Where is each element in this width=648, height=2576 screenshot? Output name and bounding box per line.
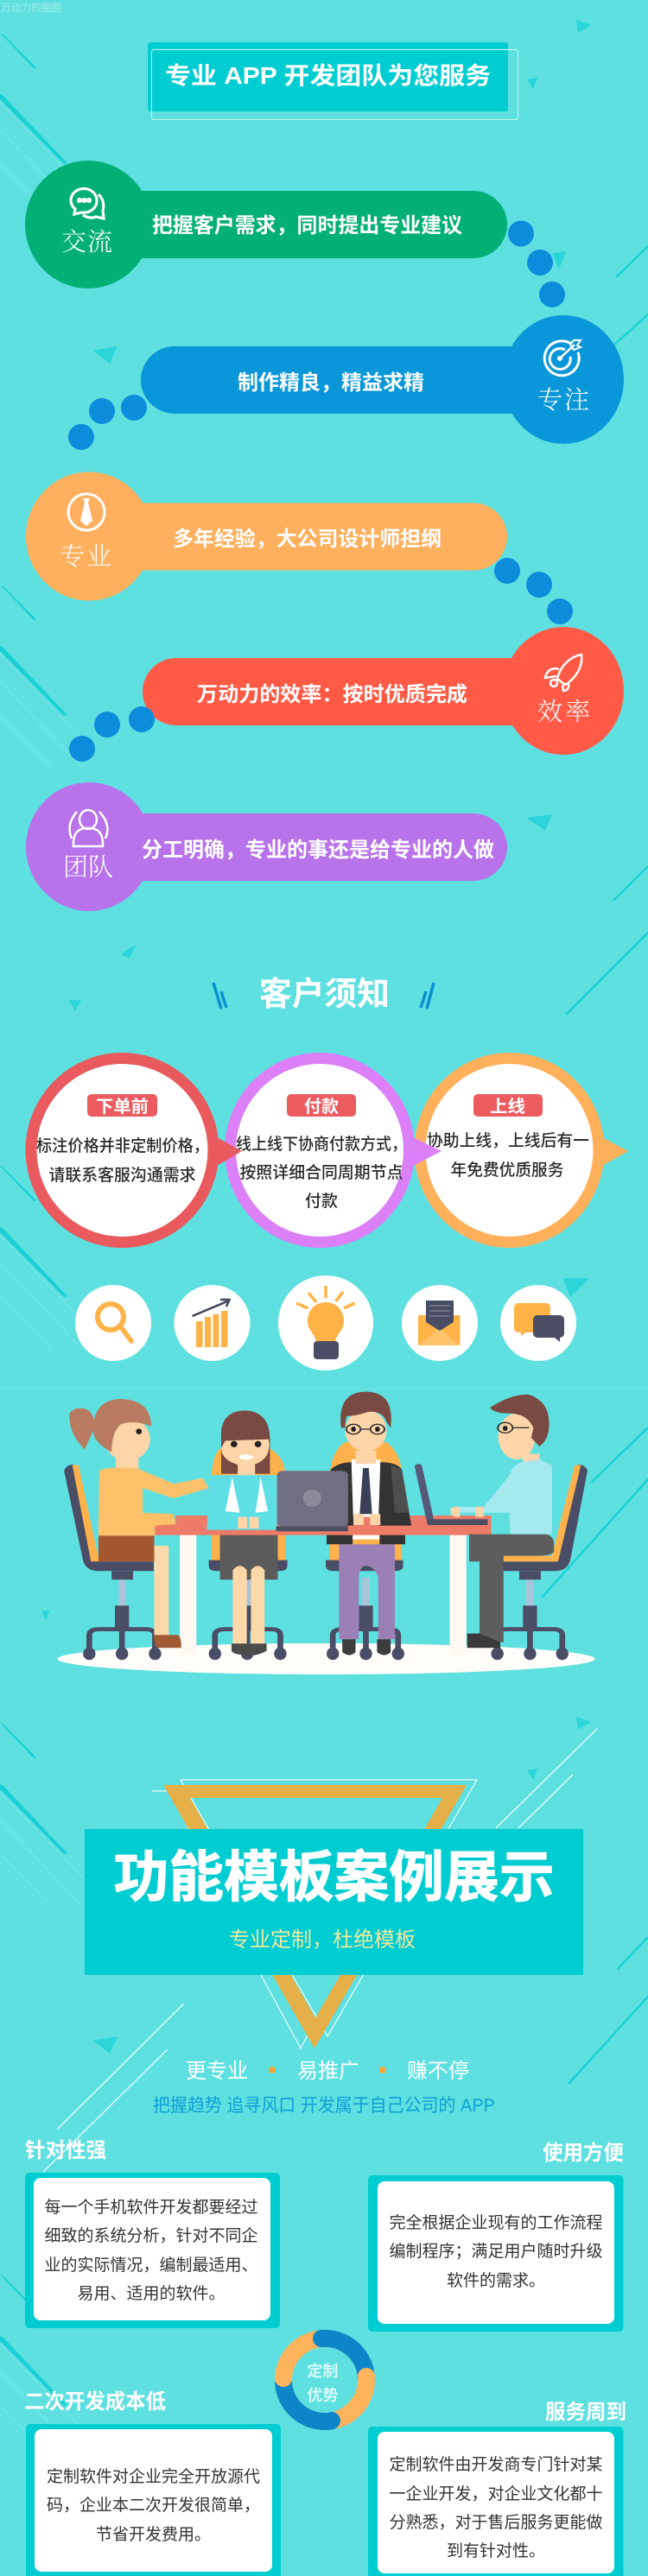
icon row: [75, 1275, 576, 1370]
text: 上线 body: 年免费优质服务: [451, 1161, 563, 1180]
badge: 下单前: [87, 1094, 157, 1117]
panel: 效率 red: [143, 627, 624, 755]
laptop: centre: [276, 1471, 348, 1531]
body text: 每一个手机软件开发都要经过: [44, 2198, 258, 2217]
body text: [47, 2467, 260, 2544]
heading: 二次开发成本低: [24, 2390, 166, 2414]
banner: 功能模板案例展示: [85, 1829, 583, 1975]
ring label: 优势: [308, 2387, 339, 2404]
heading: 服务周到: [545, 2401, 626, 2424]
panel: 专业 orange: [26, 472, 507, 601]
label: 专注: 专注: [537, 381, 589, 416]
text: 制作精良: 制作精良，精益求精: [238, 371, 424, 395]
white diagonal lines: [43, 1729, 597, 2172]
badge: 上线: 上线: [490, 1097, 525, 1117]
text: 下单前 body: 请联系客服沟通需求: [48, 1166, 195, 1185]
icon: speech bubbles: [500, 1285, 576, 1361]
panel: 二次开发成本低: [24, 2390, 281, 2576]
heading: 使用方便: [543, 2141, 624, 2165]
icon: light bulb: [278, 1275, 373, 1370]
panel: 针对性强: [25, 2139, 280, 2328]
panel: 服务周到: [368, 2401, 626, 2576]
ring: 定制优势: [275, 2330, 375, 2429]
icon: envelope: [402, 1285, 478, 1361]
connector dots 2: [68, 395, 147, 450]
slogan row: 更专业: [186, 2060, 248, 2083]
panel: 下单前: [31, 1059, 242, 1242]
body text: 业的实际情况，编制最适用、: [44, 2256, 258, 2275]
person: woman with ponytail: [69, 1399, 209, 1648]
slogan row: 易推广: [297, 2060, 359, 2083]
label: 专业: 专业: [60, 537, 111, 573]
body text: 易用、适用的软件。: [77, 2284, 226, 2303]
body text: 节省开发费用。: [96, 2525, 211, 2544]
label: 团队: 团队: [63, 848, 113, 883]
title: 专业 APP 开发团队为您服务: [165, 62, 491, 89]
tagline: 把握趋势 追寻风口 开发属于自己公司的 APP: [153, 2096, 495, 2116]
body text: 完全根据企业现有的工作流程: [389, 2213, 603, 2232]
badge: 下单前: 下单前: [96, 1097, 149, 1117]
body text: [389, 2455, 603, 2560]
panel: 上线: [420, 1059, 628, 1242]
text: 付款 body: 线上线下协商付款方式，: [236, 1134, 407, 1154]
banner heading: 功能模板案例展示: [114, 1846, 555, 1908]
body text: 编制程序；满足用户随时升级: [389, 2242, 603, 2261]
body text: [389, 2213, 603, 2290]
icon: target: [544, 340, 581, 376]
body text: 定制软件由开发商专门针对某: [389, 2455, 603, 2474]
slogan row: [186, 2060, 469, 2083]
icon: magnifier: [75, 1285, 151, 1361]
banner subtitle: 专业定制，杜绝模板: [229, 1928, 416, 1952]
person: man in blue: [451, 1395, 554, 1648]
body text: 分熟悉，对于售后服务更能做: [389, 2513, 603, 2532]
icon: growth chart: [175, 1285, 251, 1361]
body text: 码，企业本二次开发很简单，: [47, 2496, 260, 2515]
label: 交流: 交流: [61, 223, 112, 258]
badge: 付款: 付款: [304, 1097, 339, 1117]
label: 效率: 效率: [537, 693, 590, 728]
triangle frame: [152, 1780, 477, 2048]
panel: 团队 purple: [26, 782, 507, 911]
body text: [44, 2198, 258, 2303]
text: 下单前 body: [36, 1136, 209, 1185]
badge: 付款: [287, 1094, 356, 1117]
ring label: [308, 2362, 339, 2404]
body text: 到有针对性。: [447, 2541, 545, 2560]
chair: second: [209, 1448, 288, 1660]
body text: 定制软件对企业完全开放源代: [47, 2467, 260, 2486]
floor ellipse: [58, 1643, 595, 1674]
text: 下单前 body: 标注价格并非定制价格，: [36, 1136, 209, 1155]
watermark: 万动力的圈圈: [1, 1, 61, 14]
connector dots 1: [508, 221, 565, 307]
person: man in suit: [327, 1392, 411, 1655]
text: 上线 body: [427, 1131, 589, 1180]
body text: 一企业开发，对企业文化都十: [389, 2484, 603, 2503]
chair: right: [491, 1465, 588, 1660]
body text: 软件的需求。: [447, 2271, 545, 2290]
slogan row: 赚不停: [407, 2060, 469, 2083]
panel: 使用方便: [368, 2141, 624, 2332]
text: 付款 body: 付款: [305, 1192, 338, 1211]
panel: 专注 blue: [141, 315, 624, 444]
text: 多年经验: 多年经验，大公司设计师担纲: [173, 527, 442, 551]
text: 把握客户需求: 把握客户需求，同时提出专业建议: [152, 213, 462, 237]
laptop: right: [418, 1466, 488, 1525]
text: 分工明确: 分工明确，专业的事还是给专业的人做: [142, 839, 494, 862]
title: [148, 42, 518, 119]
badge: 上线: [473, 1094, 543, 1117]
icon: tie: [68, 494, 105, 530]
text: 万动力的效率: 万动力的效率：按时优质完成: [197, 683, 467, 706]
heading: 客户须知: 客户须知: [259, 977, 390, 1013]
table: [155, 1516, 491, 1655]
connector dots 4: [69, 706, 155, 762]
text: 付款 body: 按照详细合同周期节点: [240, 1163, 403, 1182]
chair: third: [326, 1442, 404, 1660]
body text: 细致的系统分析，针对不同企: [44, 2226, 258, 2245]
heading: 针对性强: [25, 2139, 106, 2162]
icon: chat bubbles: [71, 188, 104, 218]
text: 上线 body: 协助上线，上线后有一: [427, 1131, 589, 1150]
panel: 交流 green: [25, 161, 507, 288]
heading: 客户须知: [213, 977, 434, 1013]
person: woman with bangs: [206, 1410, 278, 1655]
text: 付款 body: [236, 1134, 407, 1211]
chair: left: [64, 1465, 162, 1660]
illustration: meeting team: [58, 1392, 595, 1674]
icon: rocket: [545, 655, 581, 691]
connector dots 3: [494, 558, 573, 624]
panel: 付款: [230, 1059, 442, 1242]
icon: people: [70, 810, 107, 846]
ring label: 定制: [308, 2362, 339, 2380]
